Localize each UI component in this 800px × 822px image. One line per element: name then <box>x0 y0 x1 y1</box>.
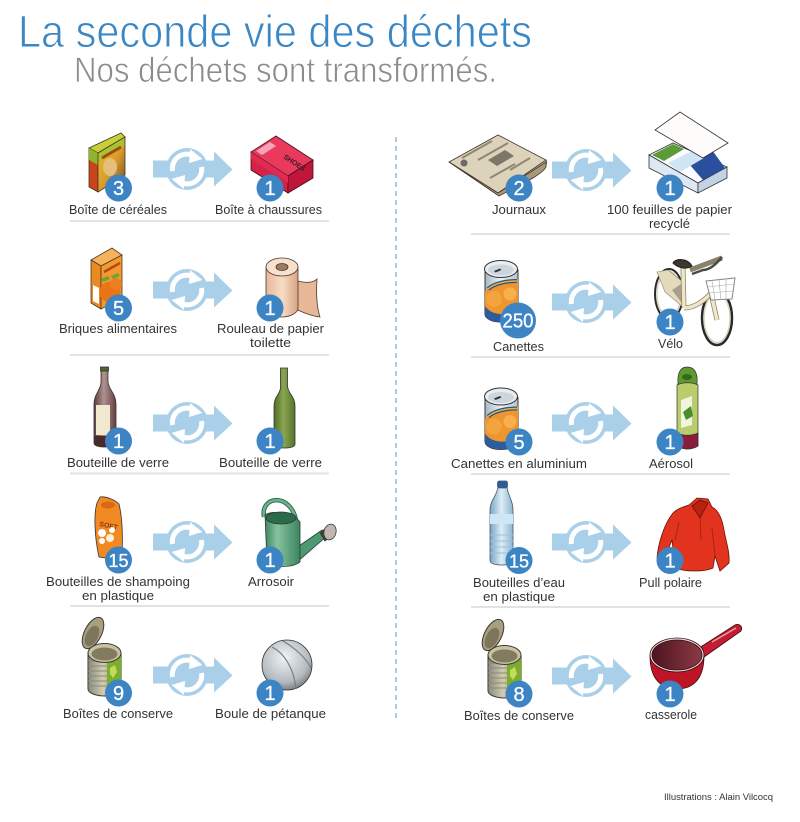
label: shampoo bottles: en plastique <box>82 589 154 603</box>
count badge: 1: 1 <box>264 431 276 453</box>
arrow <box>552 281 632 323</box>
icon: orange can <box>484 260 518 322</box>
icon: shampoo bottle: SOFT <box>99 521 119 532</box>
count badge: 15 <box>506 547 532 574</box>
label: cans: Canettes <box>493 340 544 354</box>
title: La seconde vie des déchets <box>18 6 532 57</box>
count badge: 5 <box>506 428 532 456</box>
icon: shoe box <box>251 136 313 193</box>
panel: row 2 left, food cartons to toilet roll <box>59 248 324 350</box>
label: shoe box: Boîte à chaussures <box>215 203 322 217</box>
icon: shampoo bottle <box>95 497 122 559</box>
icon: cereal box <box>89 133 125 192</box>
count badge: 1 <box>256 294 284 322</box>
label: watering can: Arrosoir <box>248 575 294 589</box>
count badge: 1: 1 <box>664 550 676 572</box>
label: recycled paper <box>607 203 732 231</box>
icon: food carton <box>91 248 122 309</box>
label: newspapers: Journaux <box>492 203 547 217</box>
icon: orange can <box>484 388 518 450</box>
icon: recycled paper pack <box>649 112 728 193</box>
arrow <box>552 655 632 697</box>
count badge: 1: 1 <box>664 178 676 200</box>
count badge: 1 <box>656 308 684 336</box>
label: shampoo bottles: Bouteilles de shampoing <box>46 575 190 589</box>
subtitle: Nos déchets sont transformés. <box>74 51 497 90</box>
arrow <box>153 148 232 190</box>
label: toilet roll: toilette <box>250 336 291 350</box>
panel: row 1 right, newspapers to recycled paper <box>449 112 732 231</box>
count badge: 1 <box>656 428 684 456</box>
icon: saucepan <box>650 624 742 689</box>
label: recycled paper: 100 feuilles de papier <box>607 203 732 217</box>
label: tin cans: Boîtes de conserve <box>63 707 173 721</box>
arrow <box>552 149 632 191</box>
label: glass bottle: Bouteille de verre <box>67 456 169 470</box>
count badge: 1: 1 <box>264 683 276 705</box>
count badge: 1: 1 <box>264 298 276 320</box>
label: aerosol: Aérosol <box>649 457 693 471</box>
label: water bottles: Bouteilles d’eau <box>473 576 565 590</box>
icon: red fleece <box>657 498 729 571</box>
icon: tin can <box>78 614 121 696</box>
label: toilet roll: Rouleau de papier <box>217 322 324 336</box>
arrow <box>153 654 232 696</box>
panel: row 2 right, cans to bicycle <box>484 257 735 354</box>
label: tin cans: Boîtes de conserve <box>464 709 574 723</box>
count badge: 1 <box>656 547 684 574</box>
label: bicycle: Vélo <box>658 337 683 351</box>
count badge: 5 <box>105 294 132 322</box>
panel: row 4 left, shampoo bottles to watering can <box>46 497 338 603</box>
count badge: 3: 3 <box>113 178 124 200</box>
label: petanque ball: Boule de pétanque <box>215 707 326 721</box>
icon: watering can <box>264 500 338 566</box>
label: cereal box: Boîte de céréales <box>69 203 167 217</box>
count badge: 1 <box>656 174 684 202</box>
count badge: 1: 1 <box>664 432 676 454</box>
arrow <box>153 402 232 444</box>
count badge: 1 <box>105 428 132 454</box>
count badge: 15: 15 <box>108 551 129 571</box>
label: aluminium cans: Canettes en aluminium <box>451 457 587 471</box>
label: toilet roll <box>217 322 324 350</box>
label: glass bottle: Bouteille de verre <box>219 456 322 470</box>
panel: row 1 left, cereal box to shoe box <box>69 133 322 217</box>
count badge: 1: 1 <box>113 431 124 453</box>
count badge: 15: 15 <box>509 552 529 572</box>
label: shampoo bottles <box>46 575 190 603</box>
count badge: 1: 1 <box>664 684 676 706</box>
count badge: 1 <box>256 546 284 574</box>
icon: tin can <box>478 616 521 698</box>
count badge: 9: 9 <box>113 683 124 705</box>
label: recycled paper: recyclé <box>649 217 690 231</box>
credit: Illustrations : Alain Vilcocq <box>664 792 773 802</box>
label: saucepan: casserole <box>645 708 697 722</box>
label: water bottles <box>473 576 565 604</box>
label: water bottles: en plastique <box>483 590 555 604</box>
count badge: 250: 250 <box>502 310 534 332</box>
icon: wine bottle <box>94 367 116 447</box>
icon: aerosol <box>677 367 698 449</box>
arrow <box>153 521 232 563</box>
icon: green bottle <box>274 368 295 448</box>
count badge: 1: 1 <box>264 178 276 200</box>
central dashed divider <box>395 137 397 722</box>
panel: row 3 right, aluminium cans to aerosol <box>451 367 698 471</box>
icon: petanque ball <box>262 640 312 690</box>
arrow <box>552 402 632 444</box>
count badge: 1 <box>256 680 284 706</box>
count badge: 1: 1 <box>664 312 676 334</box>
icon: toilet roll <box>266 258 320 317</box>
label: food cartons: Briques alimentaires <box>59 322 177 336</box>
count badge: 8 <box>506 680 532 708</box>
count badge: 1 <box>256 174 284 202</box>
count badge: 5: 5 <box>513 432 525 454</box>
count badge: 3 <box>105 174 132 202</box>
label: fleece: Pull polaire <box>639 576 702 590</box>
panel: row 5 left, tin cans to petanque ball <box>63 614 326 721</box>
icon: newspaper <box>449 135 546 196</box>
arrow <box>552 521 632 563</box>
panel: row 5 right, tin cans to saucepan <box>464 616 742 723</box>
count badge: 5: 5 <box>113 298 124 320</box>
count badge: 9 <box>105 680 132 706</box>
count badge: 2: 2 <box>513 178 525 200</box>
count badge: 1: 1 <box>264 550 276 572</box>
count badge: 2 <box>506 174 532 202</box>
count badge: 8: 8 <box>513 684 525 706</box>
panel: row 3 left, glass bottle to glass bottle <box>67 367 322 470</box>
count badge: 1 <box>656 680 684 708</box>
count badge: 1 <box>256 428 284 454</box>
icon: water bottle <box>490 481 513 565</box>
icon: shoe box: SHOES <box>282 154 307 173</box>
count badge: 15 <box>105 546 132 574</box>
count badge: 250 <box>500 302 536 338</box>
panel: row 4 right, water bottles to fleece <box>473 481 729 604</box>
arrow <box>153 269 232 311</box>
icon: bicycle <box>655 257 735 345</box>
